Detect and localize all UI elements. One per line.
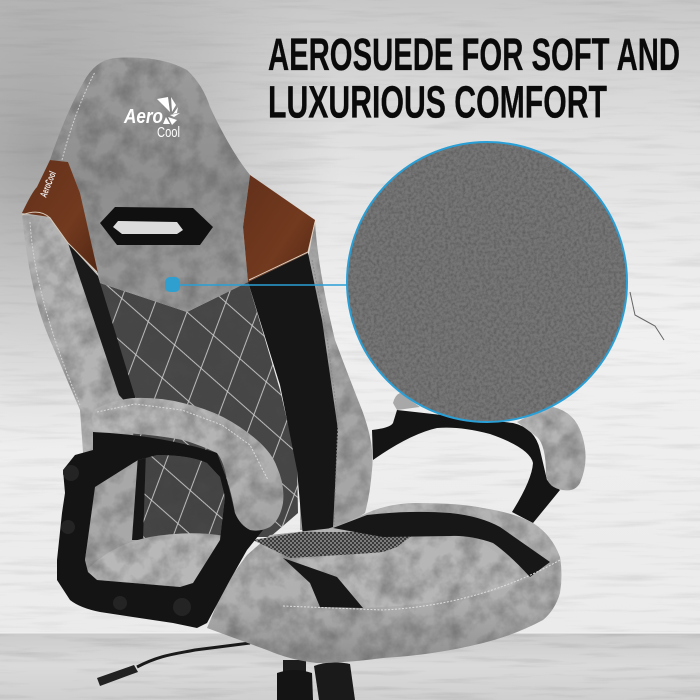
- armrest knobs: [61, 465, 191, 616]
- callout connector line: [178, 284, 348, 286]
- chair tilt lever: [97, 643, 250, 686]
- right armrest frame: [372, 410, 560, 523]
- brand text on shoulder: AeroCool: [39, 170, 59, 199]
- backrest left wing: [22, 215, 140, 567]
- diamond stitched centre panel: [100, 282, 298, 537]
- backrest right wing: [300, 222, 373, 530]
- AeroCool logo: Aero: [123, 106, 163, 128]
- callout marker dot: [165, 277, 180, 292]
- left armrest pad: [92, 398, 283, 531]
- headrest and upper backrest: [50, 58, 250, 312]
- seat centre cushion: [290, 538, 530, 608]
- title: [268, 29, 680, 128]
- side stripe stitching: [312, 260, 338, 525]
- inner view through armrest frame: [85, 455, 225, 587]
- seat cushion: [207, 503, 562, 663]
- right brown shoulder: [243, 175, 315, 282]
- chair base cylinders: [277, 660, 355, 700]
- headrest stitching: [62, 72, 95, 160]
- lumbar handle cut-out: [100, 207, 213, 245]
- AeroCool logo: [123, 97, 180, 141]
- left armrest frame: [57, 432, 263, 628]
- left black side stripe: [68, 243, 142, 420]
- AeroCool logo: Cool: [157, 124, 180, 141]
- seat mesh strip: [253, 532, 417, 558]
- small armrest pad behind circle: [393, 393, 420, 410]
- logo fan icon: [157, 97, 180, 125]
- wall crack: [630, 292, 664, 340]
- background: wooden floor: [0, 632, 700, 700]
- seat rear black band: [333, 512, 550, 577]
- callout: magnified fabric circle: [347, 142, 627, 422]
- seat front black band: [283, 558, 363, 608]
- right black side stripe: [248, 253, 338, 537]
- left brown shoulder: [22, 160, 98, 273]
- left wing stitching: [30, 222, 80, 405]
- right armrest pad: [517, 407, 586, 490]
- seat front stitching: [283, 560, 560, 610]
